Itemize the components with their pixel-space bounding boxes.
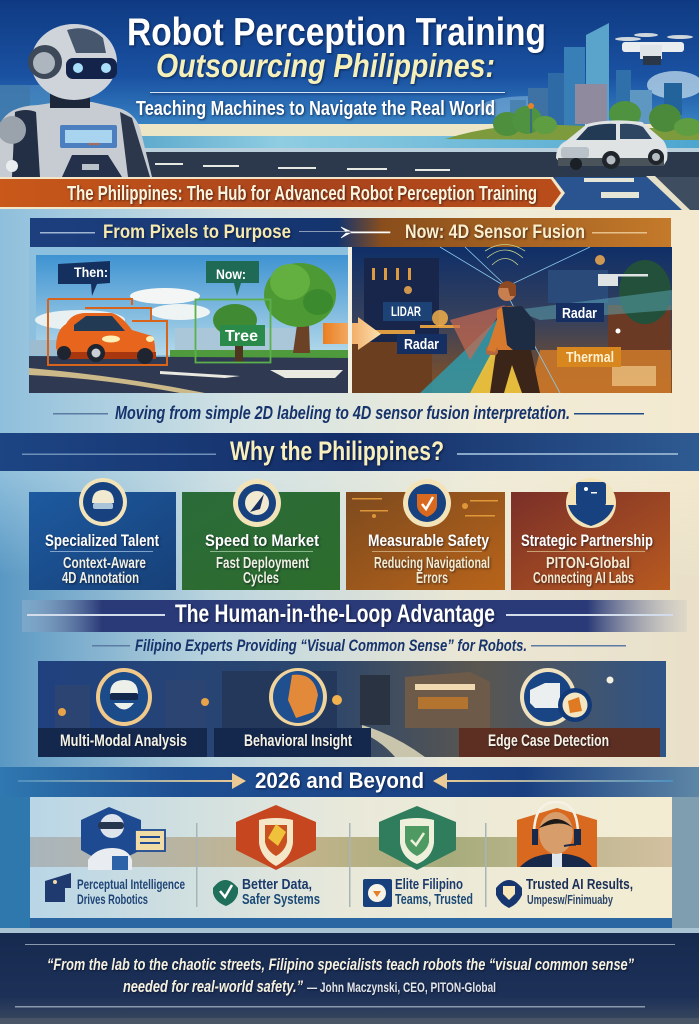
panel: Strategic Partnership: Connecting AI Labs bbox=[533, 570, 634, 587]
icon: green check shield bbox=[213, 880, 238, 906]
heading: Human-in-the-Loop bbox=[22, 600, 687, 632]
heading: Human-in-the-Loop: The Human-in-the-Loop Advantage bbox=[175, 600, 495, 628]
icon: specialist with headset bbox=[517, 802, 597, 867]
arrow: then to now bbox=[323, 317, 381, 350]
outcome: Perceptual Intelligence: Drives Robotics bbox=[77, 891, 148, 907]
panel: then 2D labeling bbox=[29, 247, 348, 393]
sensor tag: Radar right: Radar bbox=[562, 305, 597, 322]
outcome: Better Data bbox=[213, 805, 320, 908]
section: From Pixels to Purpose bbox=[29, 218, 672, 423]
panel: Speed to Market bbox=[182, 479, 340, 590]
icon: robot bbox=[0, 24, 152, 177]
callout: Now: Now: bbox=[216, 266, 246, 282]
title bbox=[127, 11, 546, 120]
icon: speedometer bbox=[233, 479, 281, 527]
outcome: Perceptual Intelligence bbox=[45, 807, 185, 907]
icon: small tree with label bbox=[196, 300, 270, 363]
icon: behavioral insight face bbox=[269, 668, 327, 726]
sensor tag: Radar: Radar bbox=[404, 336, 439, 353]
panel: Measurable Safety: Measurable Safety bbox=[368, 531, 489, 550]
panel: now 4D sensor fusion bbox=[352, 244, 672, 393]
outcome: Elite Filipino Teams bbox=[363, 806, 473, 908]
banner: Philippines hub bbox=[0, 177, 565, 209]
icon: small tree with label: Tree bbox=[225, 328, 258, 345]
heading band: From Pixels to Purpose bbox=[103, 221, 291, 243]
panel: Measurable Safety: Errors bbox=[416, 570, 448, 587]
icon: gear with helmet bbox=[79, 478, 127, 526]
subheading: Filipino Experts Providing “Visual Common Sense” for Robots. bbox=[135, 636, 527, 655]
sensor tag: LIDAR bbox=[383, 302, 432, 321]
sensor tag: LIDAR: LIDAR bbox=[391, 303, 421, 319]
panel: Strategic Partnership bbox=[511, 478, 670, 590]
panel: Strategic Partnership: PITON-Global bbox=[546, 555, 630, 572]
footer quote: — John Maczynski, CEO, PITON-Global bbox=[307, 979, 496, 995]
heading: Why the Philippines bbox=[0, 433, 699, 471]
sensor tag: Thermal: Thermal bbox=[566, 349, 614, 366]
caption: Moving from simple 2D labeling to 4D sensor fusion interpretation. bbox=[115, 403, 570, 423]
outcome: Better Data: Better Data, bbox=[242, 877, 312, 893]
icon: large tree bbox=[264, 263, 336, 353]
label bar: Edge Case Detection bbox=[459, 728, 660, 757]
icon: team badge bbox=[363, 879, 392, 907]
icon: trust shield bbox=[496, 880, 522, 908]
header hero illustration bbox=[0, 0, 699, 210]
panel: Specialized Talent: Context-Aware bbox=[63, 555, 146, 572]
outcome: Elite Filipino Teams: Elite Filipino bbox=[395, 877, 463, 893]
icon: perception badge bbox=[45, 873, 71, 902]
icon: red shield hexagon bbox=[236, 805, 316, 870]
sensor tag: Thermal bbox=[557, 347, 621, 367]
panel: Measurable Safety: Reducing Navigational bbox=[374, 555, 490, 572]
callout: Now bbox=[206, 261, 259, 296]
panel: human expertise scene bbox=[38, 661, 666, 757]
arrow bbox=[299, 227, 390, 238]
outcome: Perceptual Intelligence: Perceptual Intelligence bbox=[77, 876, 185, 892]
heading: 2026 and Beyond: 2026 and Beyond bbox=[255, 768, 424, 793]
label bar: Edge Case Detection: Edge Case Detection bbox=[488, 731, 609, 750]
label bar: Behavioral Insight bbox=[214, 728, 371, 757]
outcome: Trusted AI Results bbox=[496, 802, 633, 908]
icon: safety shield bbox=[403, 479, 451, 527]
panel: Measurable Safety bbox=[346, 479, 505, 590]
outcome: Trusted AI Results: Umpesw/Finimuaby bbox=[527, 893, 613, 907]
icon: multi-modal headset bbox=[96, 668, 152, 726]
icon: white SUV bbox=[556, 120, 668, 170]
arrow left bbox=[18, 773, 246, 789]
icon: orange car with boxes bbox=[48, 299, 167, 365]
panel: Speed to Market: Cycles bbox=[243, 570, 279, 587]
panel: Specialized Talent: Specialized Talent bbox=[45, 531, 159, 550]
heading: Why the Philippines: Why the Philippines? bbox=[230, 436, 444, 466]
panel: Strategic Partnership: Strategic Partnership bbox=[521, 531, 653, 550]
heading: 2026 and Beyond bbox=[0, 767, 699, 797]
arrow right bbox=[433, 773, 673, 789]
label bar: Multi-Modal Analysis: Multi-Modal Analysis bbox=[60, 731, 187, 750]
panel: 2026 outcomes bbox=[0, 797, 699, 933]
callout: Then bbox=[58, 261, 110, 296]
panel: Specialized Talent bbox=[29, 478, 176, 590]
icon: drone bbox=[615, 33, 693, 65]
label bar: Multi-Modal Analysis bbox=[38, 728, 207, 757]
callout: Then: Then: bbox=[74, 264, 108, 280]
icon: walking person bbox=[486, 281, 540, 393]
heading band bbox=[30, 218, 671, 247]
panel: Specialized Talent: 4D Annotation bbox=[62, 570, 139, 587]
title: Teaching Machines to Navigate the Real World bbox=[136, 98, 495, 120]
panel: Speed to Market: Speed to Market bbox=[205, 531, 319, 550]
title: Outsourcing Philippines: bbox=[156, 47, 495, 84]
panel: Speed to Market: Fast Deployment bbox=[216, 555, 309, 572]
outcome: Elite Filipino Teams: Teams, Trusted bbox=[395, 892, 473, 908]
icon: edge case detection bbox=[520, 668, 592, 726]
title: Robot Perception Training bbox=[127, 11, 546, 54]
outcome: Trusted AI Results: Trusted AI Results, bbox=[526, 877, 633, 893]
icon: green shield hexagon bbox=[379, 806, 456, 870]
city skyline bbox=[0, 23, 682, 131]
trees and coast bbox=[445, 101, 699, 140]
banner: Philippines hub: The Philippines: The Hub for Advanced Robot Perception Training bbox=[67, 183, 537, 205]
label bar: Behavioral Insight: Behavioral Insight bbox=[244, 731, 352, 750]
footer quote bbox=[0, 933, 699, 1024]
hero road markings bbox=[555, 177, 699, 210]
icon: partnership bbox=[566, 478, 616, 528]
footer quote: needed for real-world safety.” bbox=[123, 978, 304, 996]
heading band: Now: 4D Sensor Fusion bbox=[405, 221, 585, 243]
outcome: Better Data: Safer Systems bbox=[242, 892, 320, 908]
icon: robot with display bbox=[81, 807, 165, 870]
